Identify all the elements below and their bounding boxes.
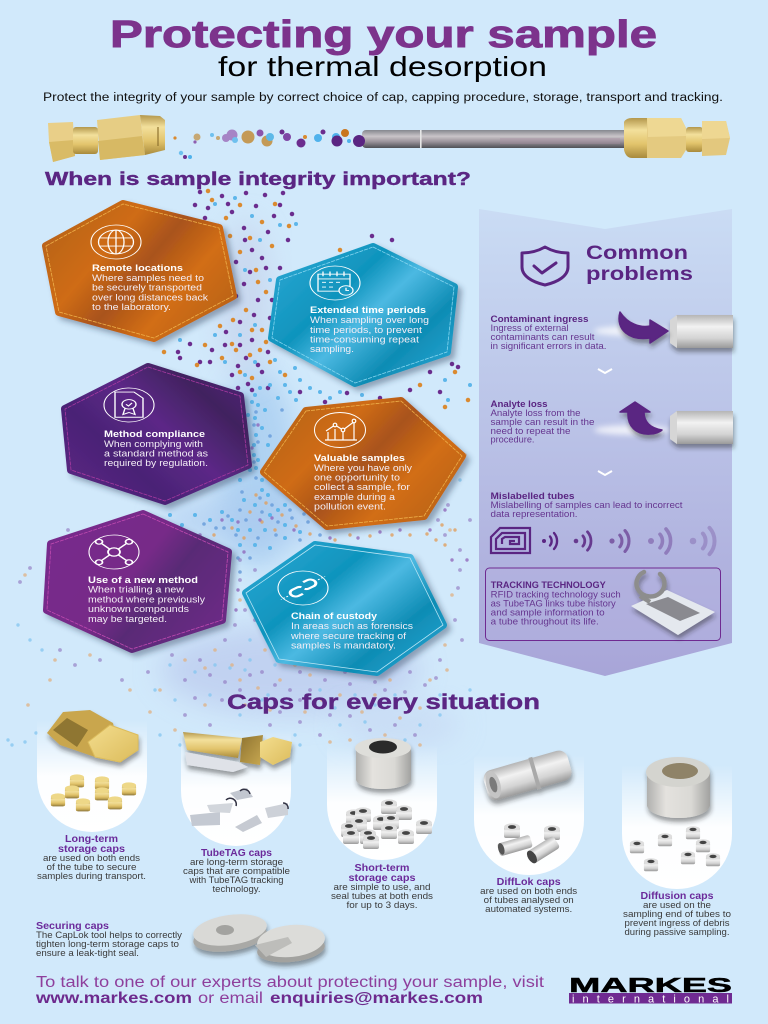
text: valuable samples: collect a sample, for (314, 482, 411, 493)
text: valuable samples: example during a (314, 492, 396, 503)
image: small silver caps (341, 799, 432, 849)
text: long-term storage caps: samples during transport. (37, 871, 146, 881)
text: diffusion caps: during passive sampling. (624, 927, 730, 937)
arrow: analyte loss (620, 402, 662, 434)
heading: common problems: problems (586, 263, 693, 285)
text: extended time periods: Extended time periods (310, 305, 426, 316)
contact text: or email (198, 990, 263, 1007)
text: extended time periods (310, 305, 429, 355)
image: small brass caps (51, 774, 136, 812)
text: valuable samples (314, 453, 412, 512)
text: extended time periods: time-consuming repeat (310, 334, 419, 346)
text: valuable samples: pollution event. (314, 502, 386, 512)
heading: common problems (586, 242, 693, 285)
glow: analyte loss (594, 425, 670, 435)
text: difflok caps: automated systems. (485, 904, 572, 914)
text: diffusion caps: Diffusion caps (640, 891, 714, 902)
panel: use of a new method (47, 514, 228, 649)
callout: tracking technology: and sample information to (491, 608, 605, 618)
text: analyte loss: need to repeat the (490, 426, 570, 436)
text: long-term storage caps (37, 834, 146, 881)
text: tubetag caps: TubeTAG caps (201, 848, 272, 859)
contact text: enquiries@markes.com (270, 990, 483, 1007)
text: method compliance: a standard method as (104, 448, 208, 460)
contact text (35, 974, 545, 1007)
callout: tracking technology: TRACKING TECHNOLOGY (491, 580, 606, 590)
text: securing caps (36, 921, 182, 958)
image: silver short-term cap (355, 738, 411, 789)
logo: markes international (569, 974, 732, 1005)
text: remote locations: to the laboratory. (92, 302, 171, 313)
text: securing caps: tighten long-term storage caps to (36, 939, 179, 949)
text: tubetag caps: are long-term storage (190, 857, 283, 867)
glow: contaminant ingress (594, 326, 670, 336)
text: securing caps: The CapLok tool helps to correctly (36, 930, 182, 940)
text: contaminant ingress: in significant errors in data. (490, 341, 606, 351)
cap panel: short-term storage caps (327, 738, 437, 910)
icon: shield with tick (522, 247, 568, 285)
text: tubetag caps: technology. (212, 884, 260, 894)
text: long-term storage caps: storage caps (58, 844, 125, 855)
text: analyte loss: Analyte loss (490, 399, 548, 409)
icon: rfid tag (491, 528, 530, 553)
text: long-term storage caps: are used on both ends (43, 853, 140, 863)
icon: globe (91, 225, 141, 259)
text: mislabelled tubes: Mislabelled tubes (490, 491, 574, 501)
text: chain of custody (290, 611, 413, 652)
icon: line chart (314, 412, 366, 448)
cap panel: tubetag caps (181, 730, 292, 894)
tube end: contaminant ingress (670, 315, 733, 348)
arrow: ingress (619, 312, 668, 343)
icon: chain link (278, 571, 328, 605)
heading: when is sample integrity important: When is sample integrity important? (45, 169, 471, 189)
tube with brass fittings (48, 115, 730, 162)
text: remote locations: be securely transported (92, 283, 202, 294)
cap panel: long-term storage caps (37, 710, 147, 881)
text: remote locations: Remote locations (92, 263, 183, 274)
intro text: Protect the integrity of your sample by correct choice of cap, capping procedure, storage, transport and tracking. (43, 92, 723, 104)
cap panel: difflok caps (474, 747, 584, 914)
text: method compliance: required by regulation. (104, 458, 208, 469)
text: short-term storage caps: Short-term (354, 863, 410, 874)
text: remote locations (92, 263, 208, 313)
text: method compliance: Method compliance (104, 429, 205, 440)
callout: tracking technology: as TubeTAG links tube history (491, 598, 616, 608)
panel: valuable samples (264, 401, 462, 526)
text: short-term storage caps: are simple to use, and (334, 882, 430, 892)
text: chain of custody: samples is mandatory. (291, 640, 396, 652)
image: diffusion cap (646, 757, 710, 818)
text: long-term storage caps: of the tube to secure (46, 862, 136, 872)
text: difflok caps: DiffLok caps (497, 877, 561, 888)
text: analyte loss: procedure. (490, 434, 534, 444)
text: contaminant ingress (490, 314, 606, 351)
text: valuable samples: Valuable samples (314, 453, 405, 464)
text: difflok caps: of tubes analysed on (484, 895, 574, 905)
text: contaminant ingress: Ingress of external (490, 323, 568, 333)
text: difflok caps: are used on both ends (480, 886, 578, 896)
particle cloud (8, 191, 470, 747)
image: small diffusion caps (630, 826, 720, 871)
image: small tubetag caps (190, 788, 288, 832)
text: tubetag caps (183, 848, 290, 894)
image: small difflok caps (497, 823, 560, 865)
text: chain of custody: Chain of custody (291, 611, 378, 622)
panel: method compliance (65, 367, 248, 501)
left brass fitting (48, 115, 165, 162)
callout: tracking technology: a tube throughout its life. (491, 616, 599, 626)
cap panel: diffusion caps (622, 757, 732, 937)
text: securing caps: ensure a leak-tight seal. (36, 948, 139, 958)
heading: common problems: Common (586, 242, 688, 264)
text: diffusion caps (623, 891, 731, 937)
text: method compliance: When complying with (104, 439, 203, 450)
text: diffusion caps: prevent ingress of debris (624, 918, 730, 928)
text: valuable samples: Where you have only (314, 463, 412, 474)
logo: markes international: international (572, 993, 729, 1005)
right brass fitting (624, 118, 730, 158)
callout: tracking technology (486, 568, 720, 640)
text: tubetag caps: caps that are compatible (183, 866, 290, 876)
text: long-term storage caps: Long-term (65, 834, 118, 845)
tube end: analyte loss (670, 411, 733, 444)
callout: tracking technology: RFID tracking technology such (491, 590, 621, 600)
text: extended time periods: time periods, to prevent (310, 325, 422, 336)
image: difflok cap (481, 747, 574, 803)
text: remote locations: over long distances back (92, 292, 208, 303)
text: difflok caps (480, 877, 578, 914)
heading: caps for every situation: Caps for every situation (227, 691, 540, 714)
icon: calendar (310, 266, 360, 300)
image: caplok tool (191, 910, 326, 965)
text: use of a new method: method where previously (88, 594, 205, 606)
text: use of a new method: Use of a new method (88, 575, 198, 586)
subtitle: for thermal desorption (218, 51, 547, 82)
text: short-term storage caps: storage caps (348, 873, 416, 884)
panel: chain of custody (246, 545, 443, 672)
image: brass cap (47, 710, 138, 762)
text: tubetag caps: with TubeTAG tracking (188, 875, 284, 885)
panel: extended time periods (272, 247, 454, 383)
icon: signal waves (542, 528, 715, 554)
text: analyte loss: Analyte loss from the (490, 408, 580, 418)
scattering dots (173, 129, 365, 159)
text: securing caps: Securing caps (36, 921, 109, 932)
text: contaminant ingress: Contaminant ingress (490, 314, 588, 324)
text: extended time periods: sampling. (310, 344, 354, 355)
text: short-term storage caps: for up to 3 days. (346, 900, 418, 910)
text: mislabelled tubes (490, 491, 683, 519)
text: remote locations: Where samples need to (92, 273, 204, 284)
text: short-term storage caps: seal tubes at both ends (331, 891, 433, 901)
text: analyte loss: sample can result in the (490, 417, 594, 427)
text: valuable samples: one opportunity to (314, 472, 400, 484)
image: tubetag brass cap (183, 732, 292, 772)
text: short-term storage caps (331, 863, 433, 910)
chevron (598, 471, 612, 475)
text: use of a new method (88, 575, 205, 625)
logo: markes international: MARKES (569, 974, 732, 997)
chevron (598, 369, 612, 373)
text: diffusion caps: are used on the (643, 900, 711, 910)
icon: certified document (104, 388, 154, 422)
text: use of a new method: When trialling a new (88, 584, 184, 596)
title: Protecting your sample (110, 14, 657, 56)
text: diffusion caps: sampling end of tubes to (623, 909, 731, 919)
panel: common problems (479, 209, 733, 676)
panel: remote locations (46, 204, 233, 338)
text: method compliance (104, 429, 208, 469)
text: extended time periods: When sampling over long (310, 315, 429, 326)
text: mislabelled tubes: data representation. (490, 509, 578, 519)
steel tube (362, 130, 632, 148)
text: mislabelled tubes: Mislabelling of samples can lead to incorrect (490, 500, 683, 510)
text: chain of custody: where secure tracking of (290, 631, 406, 642)
text: use of a new method: unknown compounds (88, 604, 189, 615)
contact text: www.markes.com (35, 990, 192, 1007)
text: use of a new method: may be targeted. (88, 614, 167, 625)
text: contaminant ingress: contaminants can result (490, 332, 595, 342)
text: analyte loss (490, 399, 594, 444)
contact text: To talk to one of our experts about protecting your sample, visit (36, 974, 545, 991)
text: chain of custody: In areas such as forensics (291, 621, 413, 632)
icon: network nodes (89, 535, 139, 569)
image: tubetag clip (631, 572, 715, 635)
